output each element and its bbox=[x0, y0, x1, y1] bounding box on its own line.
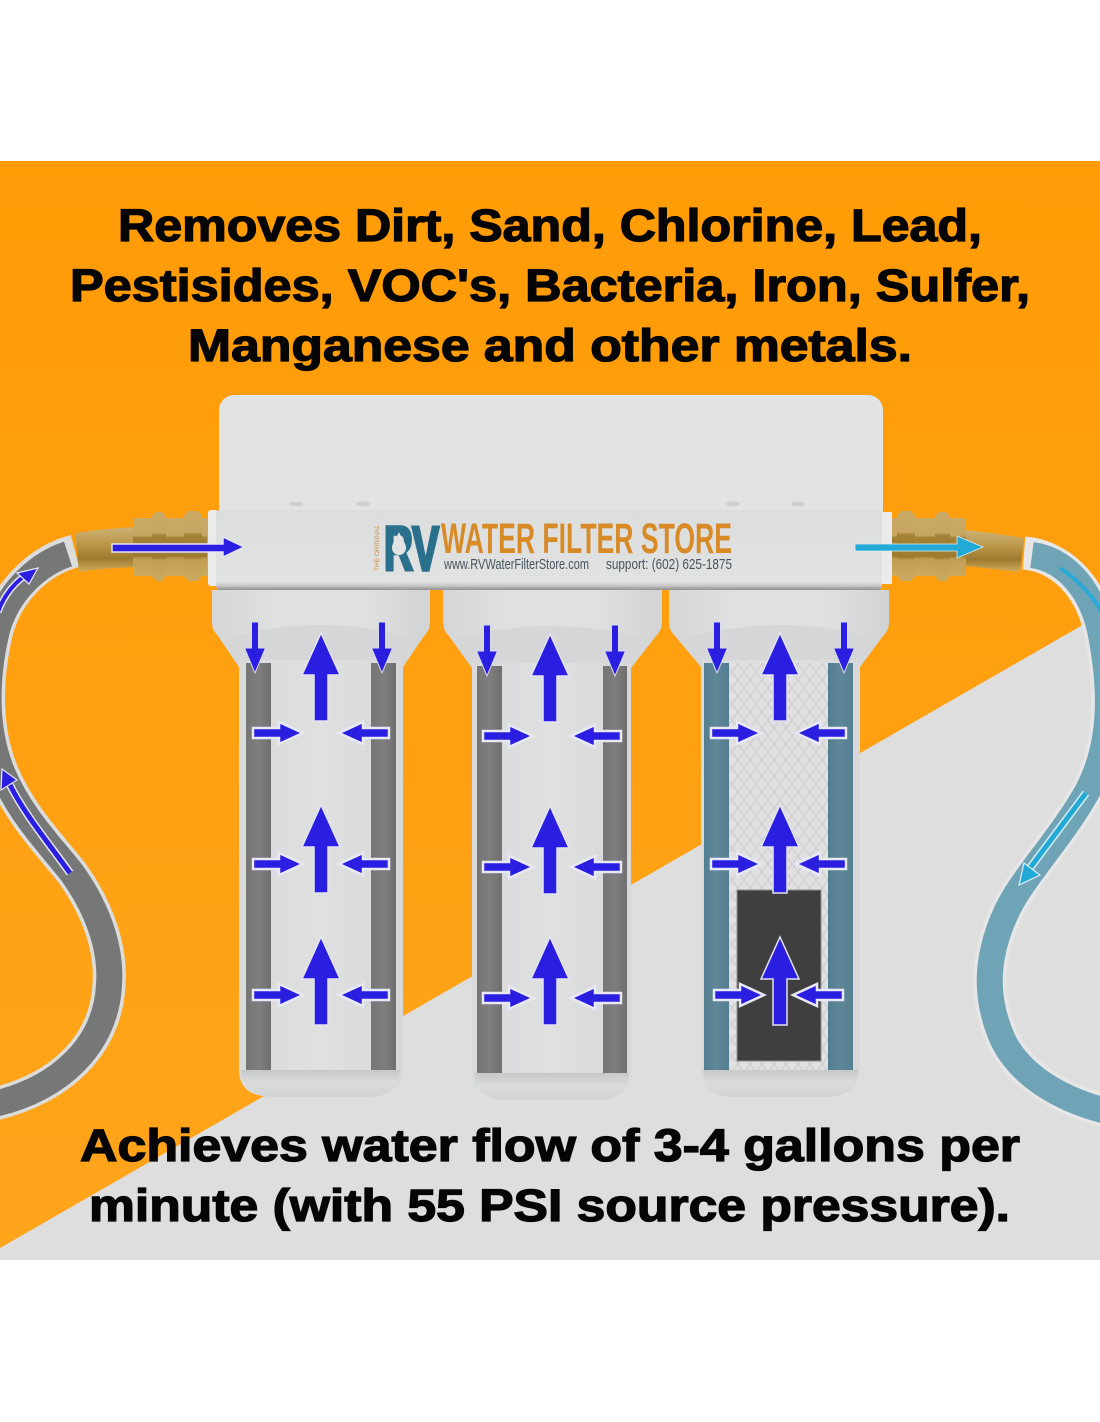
footer text: flow rate: minute (with 55 PSI source pressure). bbox=[89, 1180, 1010, 1231]
brass fitting right bbox=[892, 511, 1024, 581]
filter housing 1 bbox=[212, 590, 430, 1097]
mesh filter cartridge bbox=[729, 663, 828, 1070]
heading: contaminants removed bbox=[70, 200, 1030, 371]
brass fitting left bbox=[75, 511, 207, 581]
footer text: flow rate: Achieves water flow of 3-4 gallons per bbox=[80, 1120, 1020, 1171]
right outlet hose bbox=[990, 553, 1100, 1112]
housing 1 water channels bbox=[246, 663, 396, 1070]
carbon block bbox=[737, 890, 821, 1061]
heading: contaminants removed: Manganese and other metals. bbox=[188, 320, 912, 371]
logo phone: support: (602) 625-1875 bbox=[606, 556, 732, 573]
logo RV letters bbox=[384, 515, 439, 584]
logo website: www.RVWaterFilterStore.com bbox=[443, 556, 589, 573]
arrow: water inlet bbox=[112, 537, 244, 557]
heading: contaminants removed: Removes Dirt, Sand, Chlorine, Lead, bbox=[118, 200, 982, 251]
filter housing 3 bbox=[669, 590, 889, 1097]
logo RV letters: RV bbox=[384, 515, 439, 584]
flow arrows: housing 1 bbox=[244, 622, 392, 1025]
arrow: hose lower left bbox=[1, 769, 70, 873]
mounting back plate bbox=[219, 395, 883, 525]
housing 2 water channels bbox=[477, 666, 627, 1073]
arrow: water outlet bbox=[855, 536, 983, 558]
logo wordmark: WATER FILTER STORE bbox=[441, 515, 732, 563]
flow arrows: housing 3 bbox=[706, 622, 854, 1025]
filter housing 2 bbox=[443, 590, 662, 1100]
housing 3 water channels bbox=[704, 663, 853, 1070]
heading: contaminants removed: Pestisides, VOC's, Bacteria, Iron, Sulfer, bbox=[70, 260, 1030, 311]
manifold bar bbox=[208, 510, 892, 590]
arrow: hose upper right bbox=[1060, 568, 1100, 612]
logo: RV Water Filter Store bbox=[375, 515, 732, 584]
flow arrows: housing 2 bbox=[476, 625, 626, 1025]
infographic background panel bbox=[0, 161, 1100, 1260]
logo small tagline: THE ORIGINAL bbox=[375, 524, 381, 571]
footer text: flow rate bbox=[80, 1120, 1020, 1231]
arrow: hose lower right bbox=[1019, 793, 1086, 885]
left inlet hose bbox=[0, 551, 109, 1105]
arrow: hose upper left bbox=[0, 568, 38, 612]
